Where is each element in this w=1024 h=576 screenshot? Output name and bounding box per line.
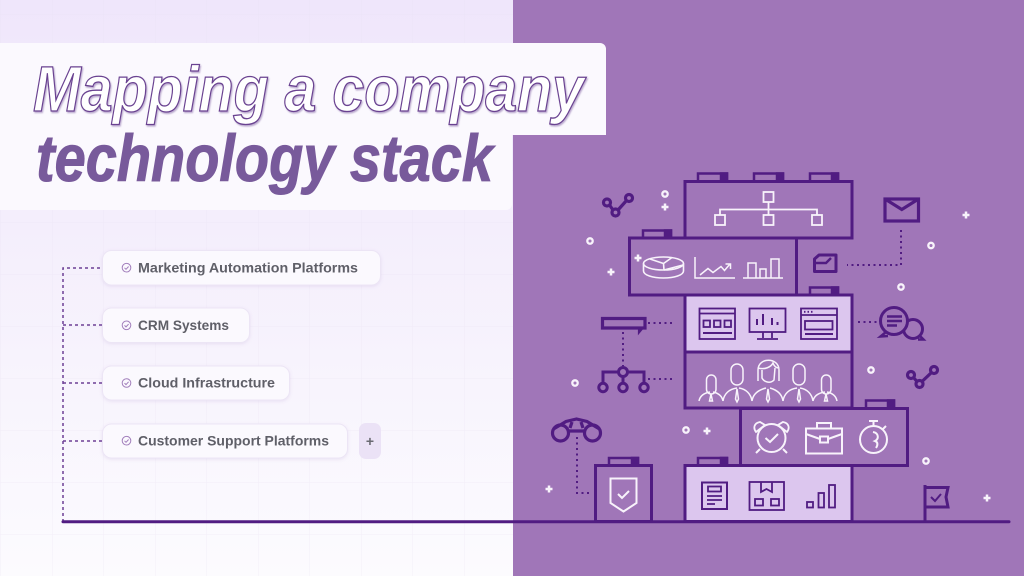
icon: binoculars bbox=[552, 419, 600, 441]
icon: line chart bbox=[695, 257, 735, 278]
icon: browser bbox=[801, 308, 837, 339]
icon: mail bbox=[885, 199, 918, 221]
icon: document bbox=[702, 482, 727, 509]
icon: org chart bbox=[715, 192, 822, 225]
connector: mail to folder bbox=[847, 230, 901, 265]
icon: tag bbox=[602, 318, 645, 331]
block tabs bbox=[609, 174, 894, 465]
pill: Cloud Infrastructure bbox=[102, 366, 290, 400]
icon: alarm clock bbox=[754, 422, 789, 453]
panel: right background bbox=[513, 0, 1024, 576]
icon: package bbox=[750, 482, 784, 510]
pill: CRM Systems bbox=[102, 308, 250, 342]
block: org chart bbox=[685, 182, 852, 238]
icon: bar chart bbox=[743, 259, 783, 278]
block: storage bbox=[685, 466, 852, 522]
icon: connector node left bbox=[604, 194, 632, 216]
block: people bbox=[685, 352, 852, 408]
icon: hierarchy bbox=[599, 368, 648, 392]
block: analytics bbox=[630, 238, 796, 295]
connector: chat dots bbox=[858, 321, 877, 323]
panel: left background bbox=[0, 0, 514, 576]
pill: Customer Support Platforms: Customer Support Platforms bbox=[138, 432, 329, 448]
title: Mapping a company bbox=[33, 53, 587, 125]
pill: CRM Systems: CRM Systems bbox=[138, 317, 229, 333]
pill: Cloud Infrastructure: Cloud Infrastructure bbox=[138, 375, 275, 391]
decorative plus signs bbox=[546, 204, 990, 502]
icon: shield bbox=[610, 478, 636, 512]
pill: Customer Support Platforms bbox=[102, 424, 348, 458]
block: security bbox=[596, 466, 652, 522]
icon: stopwatch bbox=[860, 421, 887, 453]
connector: dashed tree bbox=[63, 268, 102, 522]
block: time and work bbox=[740, 408, 908, 466]
title bbox=[33, 53, 587, 195]
plus button bbox=[359, 423, 381, 459]
pill: Marketing Automation Platforms: Marketing Automation Platforms bbox=[138, 260, 358, 276]
icon: connector node right bbox=[908, 366, 938, 388]
title: technology stack bbox=[36, 121, 496, 195]
icon: people bbox=[699, 360, 837, 402]
connector: tag dots bbox=[623, 323, 673, 379]
icon: signal bars bbox=[807, 485, 835, 508]
icon: pie cylinder bbox=[644, 257, 684, 278]
block: dashboards bbox=[685, 295, 852, 352]
icon: folder bbox=[814, 255, 836, 272]
stack illustration bbox=[63, 174, 1009, 522]
icon: briefcase bbox=[806, 423, 842, 454]
icon: dashboard window bbox=[700, 308, 735, 339]
plus button: + bbox=[366, 433, 374, 449]
icon: monitor bbox=[750, 308, 786, 339]
icon: flag bbox=[925, 485, 948, 522]
icon: chat bubbles bbox=[880, 308, 924, 340]
ground line bbox=[63, 520, 1009, 523]
pill: Marketing Automation Platforms bbox=[102, 250, 380, 285]
decorative rings bbox=[572, 191, 934, 464]
connector: binoculars to shield bbox=[577, 437, 589, 493]
title card bbox=[0, 43, 606, 210]
